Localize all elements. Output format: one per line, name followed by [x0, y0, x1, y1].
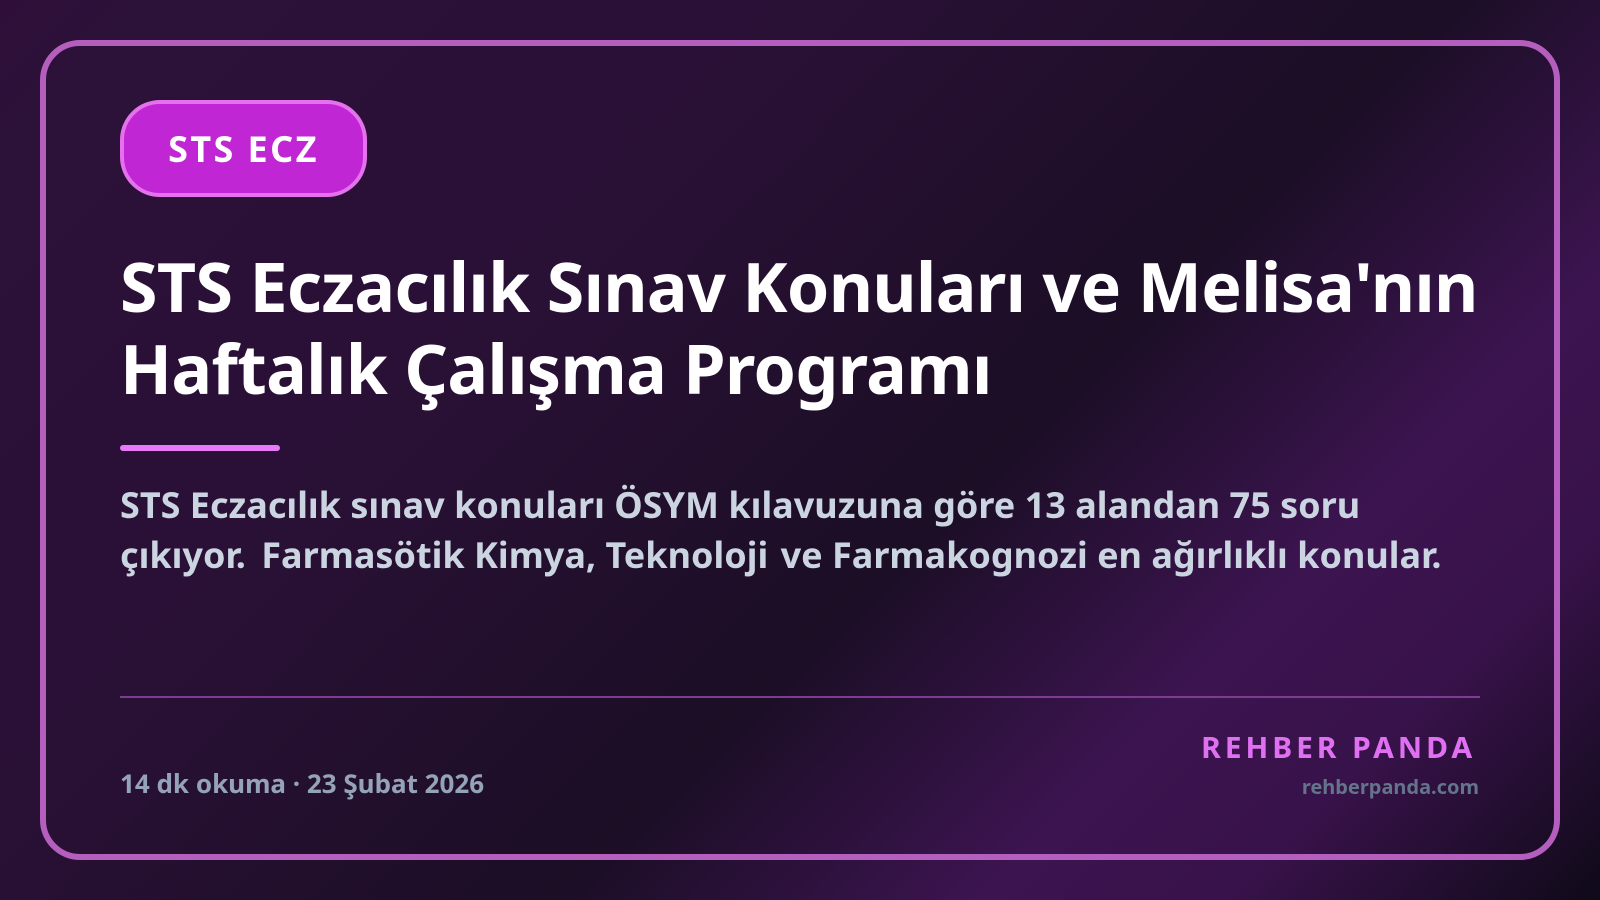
accent rule — [120, 445, 280, 451]
website: rehberpanda.com — [1302, 773, 1479, 800]
category badge: STS ECZ — [168, 124, 319, 173]
title — [120, 239, 1478, 414]
title: STS Eczacılık Sınav Konuları ve Melisa'nın — [120, 239, 1478, 332]
description: çıkıyor. Farmasötik Kimya, Teknoloji ve Farmakognozi en ağırlıklı konular. — [120, 530, 1442, 579]
footer divider — [120, 696, 1480, 698]
description: STS Eczacılık sınav konuları ÖSYM kılavuzuna göre 13 alandan 75 soru — [120, 480, 1360, 529]
reading time and date: 14 dk okuma · 23 Şubat 2026 — [120, 765, 484, 801]
description — [120, 480, 1442, 579]
brand name: REHBER PANDA — [1201, 726, 1476, 767]
title: Haftalık Çalışma Programı — [120, 321, 992, 414]
category badge — [120, 100, 367, 197]
